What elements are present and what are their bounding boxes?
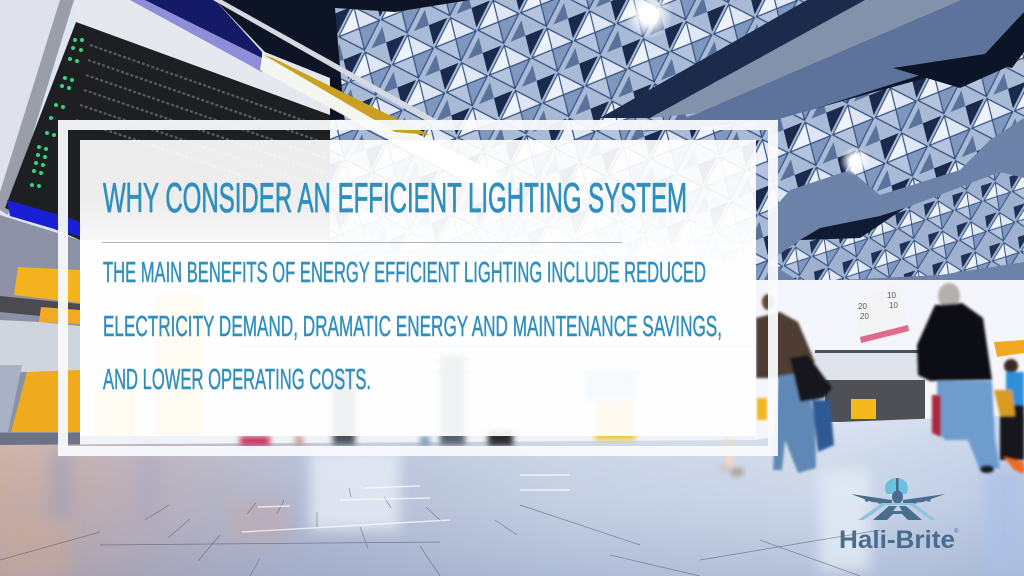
icon: runway H bbox=[858, 503, 936, 520]
yellow panel small bbox=[39, 307, 80, 324]
divider bbox=[102, 242, 622, 243]
departures board bbox=[5, 22, 330, 240]
base strip bbox=[0, 433, 80, 447]
floor reflections bbox=[0, 450, 1024, 576]
registered mark: ® bbox=[954, 528, 959, 535]
icon: sky arcs bbox=[885, 478, 908, 494]
ceiling truss: central section bbox=[335, 0, 808, 130]
orange sign right bbox=[994, 340, 1024, 357]
hall dark line bbox=[815, 350, 920, 353]
ceiling light: top bbox=[625, 0, 673, 39]
white frame bbox=[58, 120, 778, 456]
ceiling light: right bbox=[840, 146, 870, 176]
ceiling beam: base fill on right bbox=[768, 90, 1024, 290]
ghost walkers behind panel bbox=[240, 355, 635, 446]
kiosk yellow base bbox=[11, 370, 80, 432]
hall balcony band bbox=[815, 350, 925, 380]
floor highlights bbox=[242, 475, 570, 532]
yellow counter bbox=[851, 399, 876, 419]
dark band bbox=[0, 296, 80, 320]
logo: Hali-Brite bbox=[839, 478, 959, 554]
overhead sign: 10 bbox=[889, 301, 898, 310]
body text: AND LOWER OPERATING COSTS. bbox=[103, 364, 371, 396]
overhead sign: 20 bbox=[860, 312, 869, 321]
wall below sign bbox=[0, 215, 80, 440]
overhead sign: 10 bbox=[887, 291, 896, 300]
walker: black jacket with jeans bbox=[917, 283, 1000, 473]
dark accent behind right truss bbox=[893, 12, 1024, 88]
kiosk stripes bbox=[0, 365, 22, 432]
silver column bbox=[0, 0, 74, 215]
ceiling band: navy shadow bbox=[600, 0, 865, 118]
ceiling truss: lower right section bbox=[768, 172, 1024, 282]
body text bbox=[103, 257, 722, 396]
passenger: blue shirt at right edge bbox=[994, 359, 1024, 474]
board housing bbox=[75, 0, 330, 125]
ceiling shadow above lower truss bbox=[800, 208, 905, 240]
left wall bbox=[0, 0, 64, 190]
floor shading bbox=[0, 415, 1024, 576]
white band beside yellow bbox=[260, 56, 500, 200]
hall lower dark wall bbox=[825, 380, 925, 422]
yellow stripe bbox=[264, 55, 430, 135]
purple band bbox=[135, 0, 262, 72]
board row texture bbox=[76, 45, 325, 203]
logo wordmark: Hali-Brite bbox=[839, 526, 955, 554]
yellow panel upper bbox=[14, 267, 80, 303]
far right hall white bbox=[756, 280, 1024, 445]
blurred walker: feet near centre bbox=[719, 440, 744, 476]
translucent text panel bbox=[80, 140, 756, 436]
ghost hall stripes bbox=[85, 250, 760, 374]
ceiling beam: light grey band bbox=[650, 0, 962, 118]
silver diagonal rail bbox=[213, 0, 446, 127]
ceiling truss: right section bbox=[768, 52, 1024, 215]
ghost yellow kiosks bbox=[95, 295, 203, 436]
overhead sign: 20 bbox=[858, 302, 867, 311]
floor joints bbox=[0, 488, 880, 576]
ceiling truss: continuation behind panel bbox=[330, 110, 790, 290]
board green lights bbox=[30, 38, 84, 188]
icon: airplane bbox=[851, 478, 945, 504]
purple fade bbox=[130, 0, 262, 72]
blue departures sign bbox=[7, 200, 92, 238]
ceiling beam: blue face bbox=[640, 0, 1024, 132]
walker: brown jacket with jeans bbox=[756, 294, 834, 473]
ceiling: dark void bbox=[215, 0, 1024, 290]
kiosk pale body bbox=[0, 320, 80, 400]
middle hall haze bbox=[80, 200, 756, 445]
overhead sign bbox=[855, 283, 911, 345]
floor bbox=[0, 415, 1024, 576]
